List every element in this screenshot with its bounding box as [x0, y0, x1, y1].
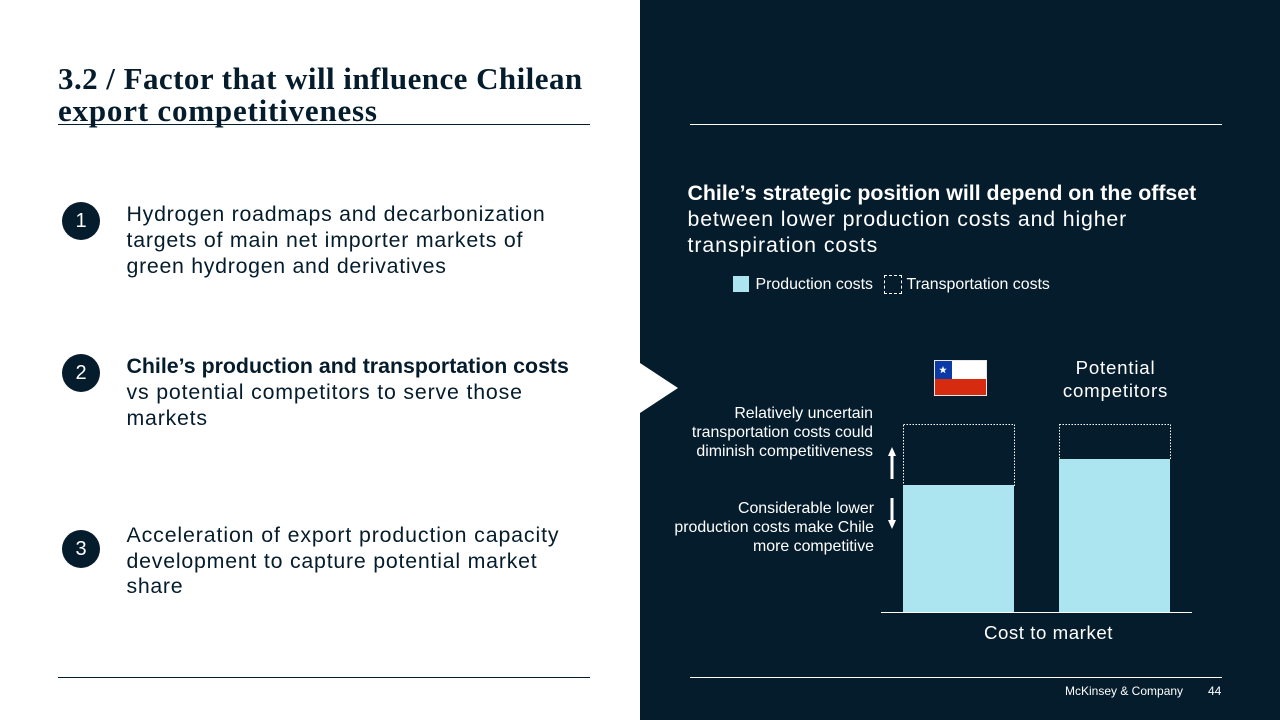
title: [58, 61, 583, 128]
panel: dark right background: [640, 0, 1280, 720]
axis label: cost to market: Cost to market: [984, 622, 1113, 643]
axis baseline: [881, 612, 1192, 614]
text block: factor 2: vs potential competitors to serve those: [126, 380, 523, 404]
legend swatch: transportation costs: [884, 275, 902, 294]
text block: factor 1: targets of main net importer markets of: [126, 228, 523, 252]
arrow: down: [888, 498, 896, 529]
label: transportation note: transportation costs could: [692, 424, 873, 441]
text block: strategic position heading: Chile’s strategic position will depend on the offset: [688, 181, 1196, 205]
text block: factor 3: [126, 523, 559, 598]
label: production note: more competitive: [753, 538, 874, 555]
label: production note: [674, 500, 874, 555]
arrow: up: [888, 447, 896, 479]
text block: factor 1: green hydrogen and derivatives: [126, 254, 447, 278]
legend: [733, 275, 1050, 294]
badge: number 3: 3: [75, 538, 87, 560]
chart: cost to market: [881, 357, 1192, 643]
text block: factor 3: development to capture potential market: [126, 548, 538, 572]
legend label: production costs: Production costs: [756, 276, 873, 293]
legend swatch: production costs: [733, 276, 749, 292]
text block: factor 3: share: [126, 574, 183, 598]
badge: number 1: 1: [75, 210, 87, 232]
badge: number 1: [62, 202, 100, 240]
label: production note: production costs make Chile: [674, 519, 874, 536]
label: transportation note: Relatively uncertain: [734, 404, 873, 422]
text block: factor 2: [126, 354, 569, 430]
text block: factor 3: Acceleration of export production capacity: [126, 523, 559, 547]
badge: number 2: 2: [75, 362, 87, 384]
bar: competitors production costs: [1059, 459, 1170, 612]
badge: number 2: [62, 354, 100, 392]
label: potential competitors: competitors: [1063, 380, 1168, 401]
label: transportation note: [692, 404, 873, 460]
legend label: transportation costs: Transportation costs: [906, 276, 1050, 293]
badge: number 3: [62, 530, 100, 568]
footer: source: McKinsey & Company: [1065, 684, 1183, 698]
text block: factor 2: Chile’s production and transportation costs: [126, 354, 569, 378]
footer: page number: 44: [1208, 684, 1221, 698]
text block: strategic position heading: between lower production costs and higher: [688, 207, 1127, 231]
label: production note: Considerable lower: [738, 500, 874, 516]
icon: Chilean flag: [934, 360, 986, 396]
bar: competitors transportation costs: [1060, 424, 1170, 460]
label: potential competitors: Potential: [1076, 357, 1155, 378]
label: transportation note: diminish competitiveness: [696, 443, 873, 460]
arrow: panel pointer notch: [640, 363, 678, 413]
text block: factor 1: Hydrogen roadmaps and decarbonization: [126, 202, 546, 226]
text block: strategic position heading: transpiration costs: [688, 233, 878, 257]
title: 3.2 / Factor that will influence Chilean: [58, 61, 583, 96]
text block: factor 2: markets: [126, 406, 208, 430]
text block: strategic position heading: [688, 181, 1196, 257]
bar: Chile production costs: [903, 485, 1014, 612]
text block: factor 1: [126, 202, 546, 278]
title: export competitiveness: [58, 93, 378, 128]
bar: Chile transportation costs: [904, 424, 1014, 486]
